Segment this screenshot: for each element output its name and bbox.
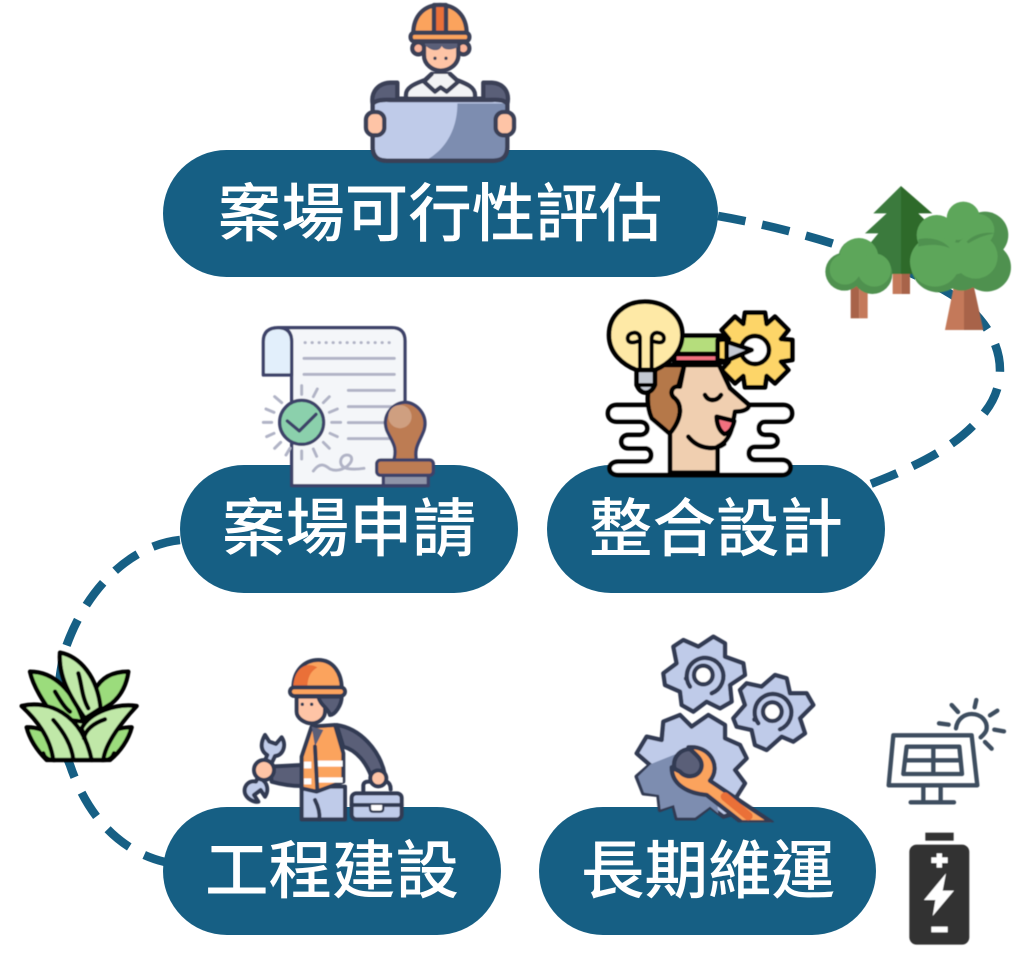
big gear	[637, 715, 772, 822]
icon: battery	[909, 833, 969, 945]
icon: permit document with stamp	[263, 328, 433, 486]
hair	[648, 365, 684, 434]
gear	[718, 313, 792, 387]
pill: feasibility assessment: 案場可行性評估	[218, 180, 662, 250]
vest	[302, 725, 343, 792]
folded corner	[263, 328, 292, 375]
icon: gears and wrench	[637, 637, 813, 822]
small gear right	[733, 675, 813, 750]
left arm	[270, 765, 302, 786]
small gear top	[663, 637, 745, 712]
hard hat	[293, 660, 342, 688]
pill: feasibility assessment	[163, 150, 718, 277]
face	[670, 365, 749, 473]
pants	[302, 787, 345, 819]
pill: construction: 工程建設	[205, 837, 459, 907]
pill: construction	[163, 807, 501, 935]
icon: head with light bulb, pencil and gear	[608, 302, 792, 475]
pill: site application	[180, 465, 518, 593]
pill: integrated design: 整合設計	[589, 495, 843, 565]
pill: long-term maintenance: 長期維運	[581, 837, 835, 907]
check seal	[280, 400, 324, 444]
wrench	[672, 747, 772, 822]
icon: forest trees	[825, 186, 1011, 330]
icon: construction worker with wrench and toolbox	[245, 660, 402, 819]
large tree	[945, 284, 964, 330]
hand	[254, 760, 274, 780]
rubber stamp	[383, 474, 428, 486]
icon: solar panel with sun	[889, 700, 1004, 802]
head	[297, 697, 325, 723]
icon: grass tuft	[22, 653, 137, 760]
document sheet	[278, 328, 405, 486]
pill: integrated design	[547, 465, 885, 593]
dashed connector: top pill to design pill	[718, 216, 1000, 485]
pine tree	[865, 186, 901, 274]
wrench	[245, 735, 284, 802]
light bulb	[609, 302, 682, 370]
dashed connector: application pill to construction pill	[58, 540, 180, 862]
pencil	[674, 336, 726, 362]
small tree	[851, 285, 859, 318]
icon: engineer holding blueprint	[366, 5, 514, 161]
pill: long-term maintenance	[539, 807, 876, 935]
right arm	[337, 725, 385, 777]
toolbox	[363, 782, 391, 793]
side squiggles	[608, 405, 792, 475]
pill: site application: 案場申請	[222, 495, 476, 565]
